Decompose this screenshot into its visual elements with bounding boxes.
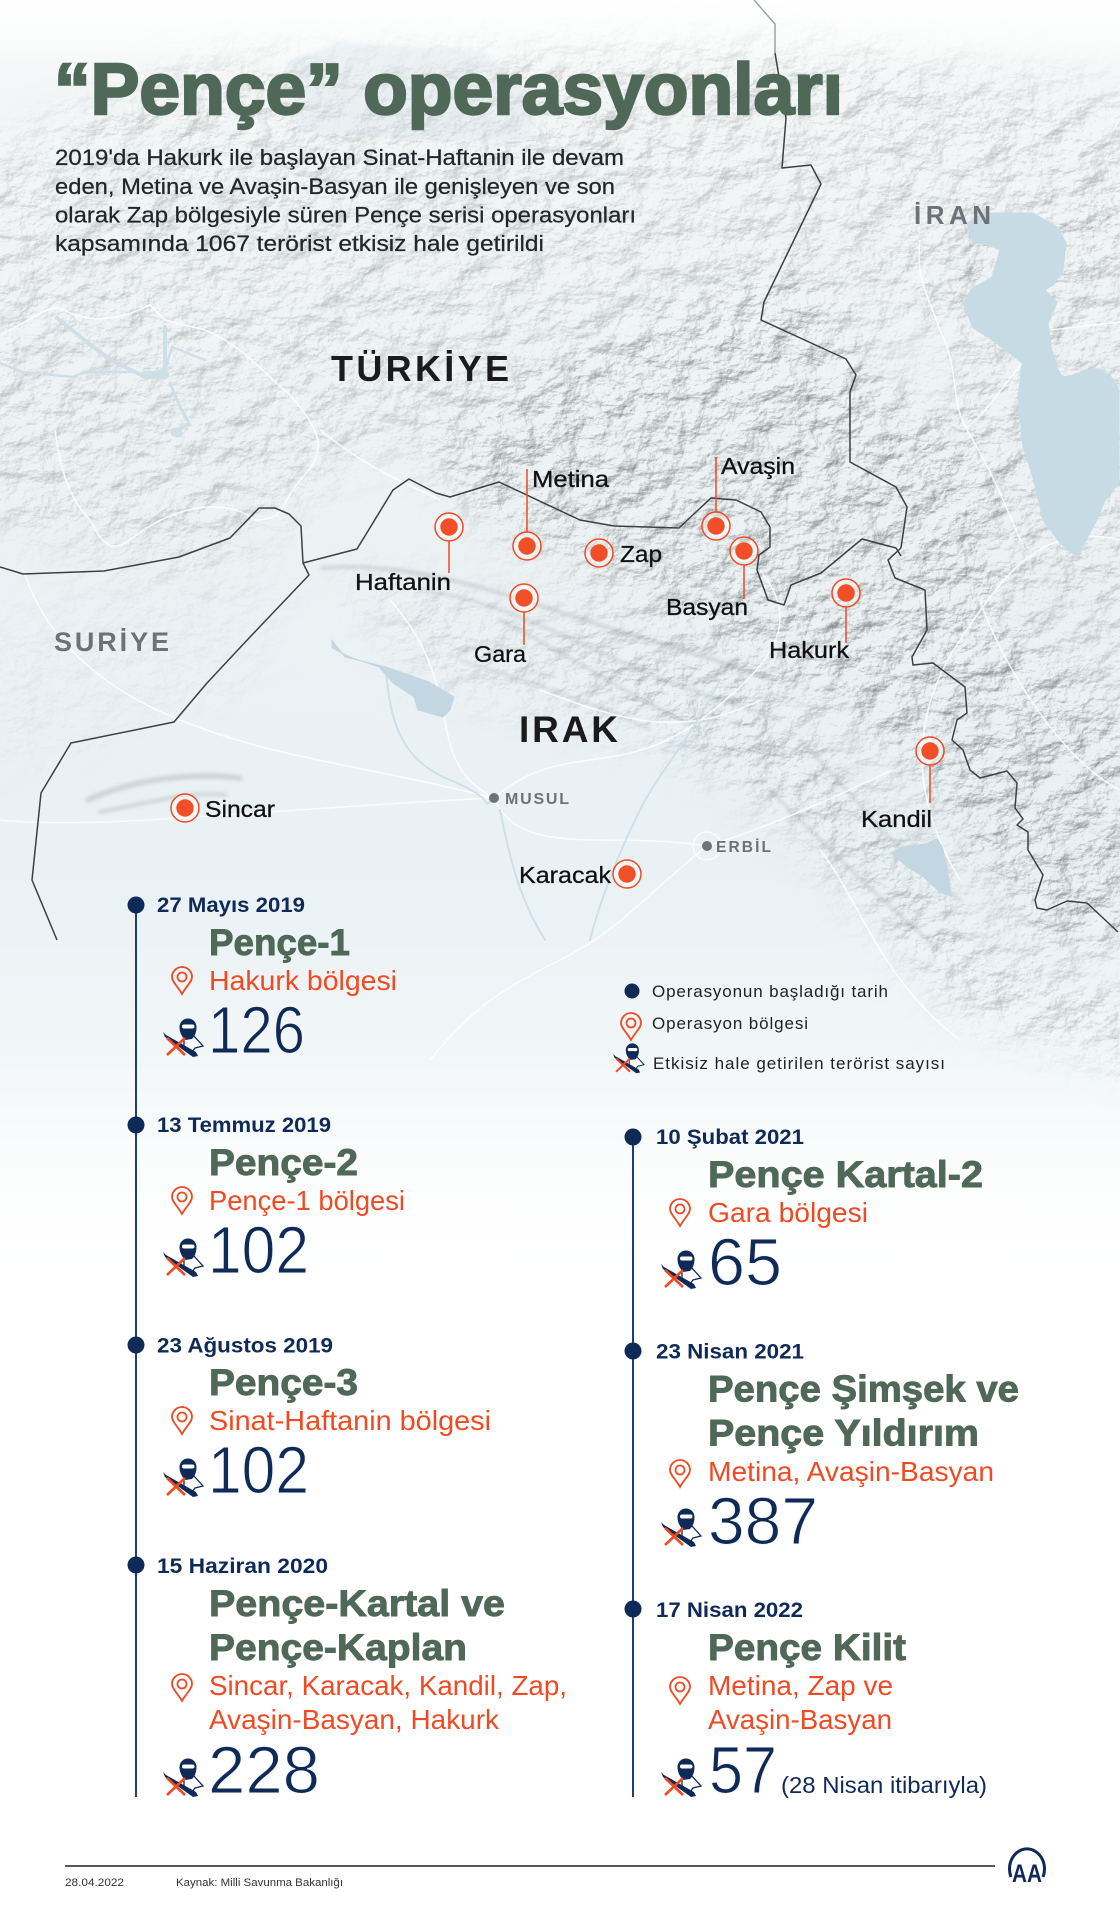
marker: Metina: Metina <box>532 466 610 492</box>
marker: Zap: Zap <box>620 541 662 567</box>
country labels: İRAN <box>914 200 991 230</box>
lake: Mosul Dam <box>332 640 454 717</box>
intro text: eden, Metina ve Avaşin-Basyan ile genişleyen ve son <box>55 174 615 199</box>
marker: Kandil: Kandil <box>861 806 932 832</box>
operation: Pençe-Kartal ve Pençe-Kaplan: 228 <box>208 1733 320 1808</box>
city: Musul: MUSUL <box>505 791 569 808</box>
marker: Basyan: Basyan <box>666 594 748 620</box>
legend: pin icon <box>621 1013 641 1040</box>
timeline line: right <box>632 1137 634 1797</box>
city: Erbil <box>693 832 771 860</box>
footer <box>65 1849 1044 1889</box>
operation: Pençe Kilit <box>624 1599 987 1808</box>
operation: Pençe-Kartal ve Pençe-Kaplan: Avaşin-Basyan, Hakurk <box>209 1704 500 1735</box>
operation: Pençe-Kartal ve Pençe-Kaplan: Pençe-Kartal ve <box>209 1583 505 1624</box>
operation: Pençe-Kartal ve Pençe-Kaplan <box>128 1555 567 1808</box>
operation: Pençe-Kartal ve Pençe-Kaplan: Pençe-Kaplan <box>209 1627 467 1668</box>
marker: Avaşin: Avaşin <box>721 453 795 479</box>
marker: Sincar <box>171 794 275 822</box>
operation: Pençe-1: Hakurk bölgesi <box>209 965 397 996</box>
operation: Pençe Kartal-2: Pençe Kartal-2 <box>708 1154 983 1195</box>
timeline line: left <box>135 905 137 1797</box>
footer: 28.04.2022 <box>65 1877 124 1889</box>
operation: Pençe-1: 126 <box>208 993 305 1068</box>
operation: Pençe Kilit: (28 Nisan itibarıyla) <box>781 1772 987 1798</box>
background map <box>0 0 1120 1118</box>
legend: Operasyon bölgesi <box>652 1014 808 1033</box>
operation: Pençe Kilit: Avaşin-Basyan <box>708 1704 892 1735</box>
operation: Pençe-1 <box>128 894 397 1068</box>
dam lakes and rivers <box>0 318 720 940</box>
operation: Pençe Şimşek ve Pençe Yıldırım: Pençe Şimşek ve <box>708 1368 1019 1410</box>
marker: Avaşin <box>702 453 795 540</box>
marker: Kandil <box>861 737 944 832</box>
operation: Pençe Kilit: Pençe Kilit <box>708 1627 906 1668</box>
operation: Pençe-1: 27 Mayıs 2019 <box>157 894 305 917</box>
marker: Hakurk: Hakurk <box>769 637 849 663</box>
operation: Pençe-Kartal ve Pençe-Kaplan: 15 Haziran 2020 <box>157 1555 328 1578</box>
operation: Pençe Kartal-2: 65 <box>708 1225 782 1300</box>
legend: Operasyonun başladığı tarih <box>652 982 888 1001</box>
operation: Pençe-3: Sinat-Haftanin bölgesi <box>209 1405 491 1436</box>
country labels: TÜRKİYE <box>331 348 509 389</box>
intro text: kapsamında 1067 terörist etkisiz hale getirildi <box>55 231 544 256</box>
operation: Pençe-2: 13 Temmuz 2019 <box>157 1114 331 1137</box>
marker: Gara <box>474 584 538 667</box>
operation: Pençe-2: Pençe-1 bölgesi <box>209 1185 405 1216</box>
logo: AA: AA <box>1012 1860 1042 1888</box>
marker: Sincar: Sincar <box>205 796 275 822</box>
marker: Basyan <box>666 537 758 620</box>
intro text <box>55 145 636 256</box>
operation: Pençe Şimşek ve Pençe Yıldırım <box>624 1340 1019 1559</box>
operation: Pençe-Kartal ve Pençe-Kaplan: Sincar, Karacak, Kandil, Zap, <box>209 1670 567 1701</box>
operation: Pençe Kartal-2 <box>624 1126 983 1300</box>
legend <box>613 982 945 1073</box>
city: Erbil: ERBİL <box>716 839 771 856</box>
operation: Pençe-3: 23 Ağustos 2019 <box>157 1334 333 1358</box>
operation: Pençe Kartal-2: 10 Şubat 2021 <box>656 1126 804 1149</box>
lake: Urmia <box>963 213 1119 557</box>
operation: Pençe Kilit: 17 Nisan 2022 <box>656 1599 803 1622</box>
marker: Karacak: Karacak <box>519 862 611 888</box>
marker: Haftanin: Haftanin <box>355 569 451 595</box>
legend: militant icon <box>613 1043 644 1073</box>
operation: Pençe-3: Pençe-3 <box>209 1362 358 1403</box>
logo: AA <box>1010 1849 1044 1888</box>
marker: Metina <box>513 466 610 560</box>
lake: Dukan <box>890 838 952 897</box>
marker: Karacak <box>519 860 641 888</box>
intro text: 2019'da Hakurk ile başlayan Sinat-Haftanin ile devam <box>55 145 624 170</box>
country labels: SURİYE <box>54 627 169 657</box>
operation: Pençe Kilit: 57 <box>709 1733 777 1808</box>
operation: Pençe-2 <box>128 1114 405 1288</box>
operation: Pençe Kartal-2: Gara bölgesi <box>708 1197 868 1228</box>
operation: Pençe-1: Pençe-1 <box>209 922 350 963</box>
operation: Pençe Kilit: Metina, Zap ve <box>708 1670 893 1701</box>
legend: date dot <box>624 984 640 998</box>
operation: Pençe Şimşek ve Pençe Yıldırım: 387 <box>708 1484 818 1559</box>
marker: Zap <box>585 539 662 567</box>
legend: Etkisiz hale getirilen terörist sayısı <box>653 1054 945 1073</box>
operation: Pençe-2: Pençe-2 <box>209 1142 358 1183</box>
intro text: olarak Zap bölgesiyle süren Pençe serisi operasyonları <box>55 202 636 228</box>
marker: Haftanin <box>355 513 463 595</box>
operation: Pençe-3 <box>128 1334 491 1508</box>
marker: Hakurk <box>769 579 860 663</box>
title: “Pençe” operasyonları <box>54 50 843 130</box>
country labels <box>54 200 991 750</box>
border lines <box>0 0 1118 940</box>
operation: Pençe-2: 102 <box>208 1213 309 1288</box>
operation: Pençe Şimşek ve Pençe Yıldırım: Pençe Yıldırım <box>708 1412 979 1454</box>
operation: Pençe-3: 102 <box>208 1433 309 1508</box>
country labels: IRAK <box>519 709 618 750</box>
operation: Pençe Şimşek ve Pençe Yıldırım: 23 Nisan 2021 <box>656 1340 804 1364</box>
operation: Pençe Şimşek ve Pençe Yıldırım: Metina, Avaşin-Basyan <box>708 1456 994 1487</box>
marker: Gara: Gara <box>474 641 527 667</box>
footer: Kaynak: Milli Savunma Bakanlığı <box>176 1877 343 1889</box>
